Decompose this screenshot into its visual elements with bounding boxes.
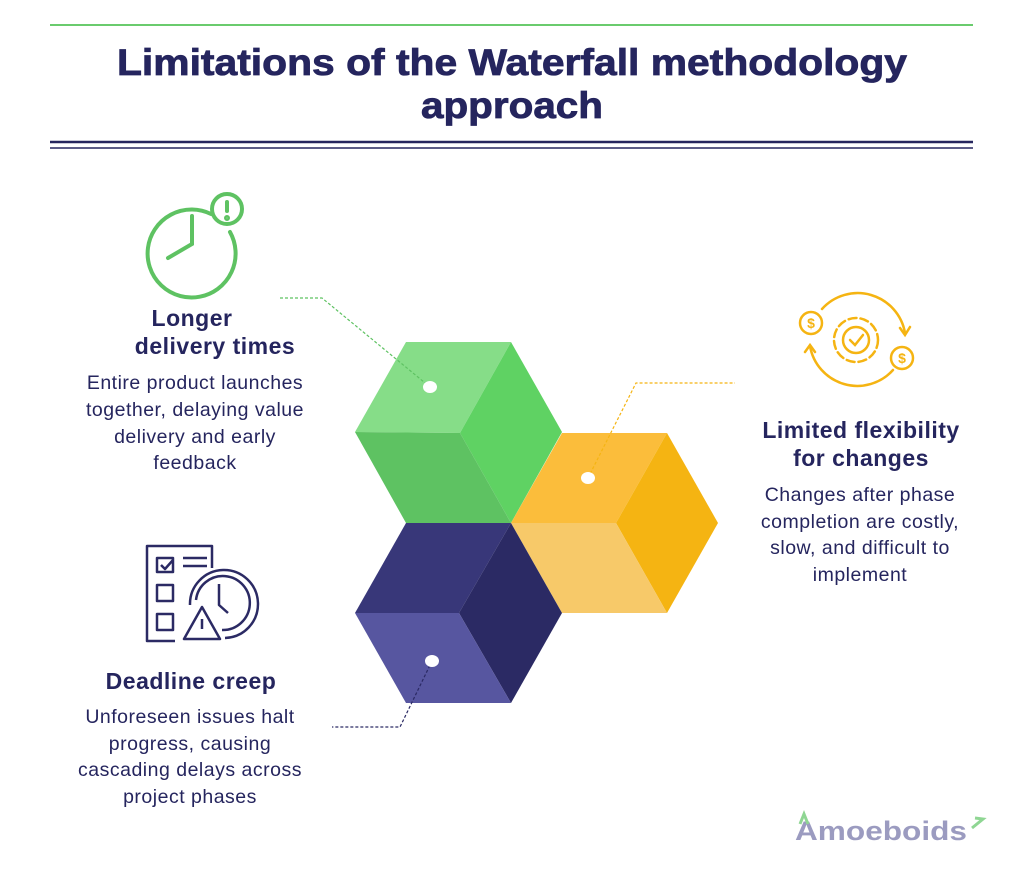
icon: gear with money cycle: $ (807, 315, 815, 331)
text: longer delivery times: Entire product launches (87, 372, 303, 394)
text: longer delivery times: delivery and early (114, 426, 276, 448)
icon: checklist with clock and warning (147, 546, 258, 641)
text: longer delivery times: together, delaying value (86, 399, 304, 421)
text: limited flexibility: Changes after phase (765, 484, 955, 506)
title (117, 42, 907, 126)
text: limited flexibility (761, 417, 960, 586)
text: limited flexibility: implement (813, 564, 907, 586)
icon: gear with money cycle: $ (898, 350, 906, 366)
logo: Amoeboids: Amoeboids (795, 816, 967, 846)
text: deadline creep: Deadline creep (106, 668, 276, 694)
text: limited flexibility: completion are costly, (761, 511, 959, 533)
text: longer delivery times: delivery times (135, 333, 295, 359)
cube: green (355, 342, 562, 523)
text: deadline creep: project phases (123, 786, 257, 808)
text: limited flexibility: Limited flexibility (762, 417, 960, 443)
connector: green (280, 298, 437, 393)
title: Limitations of the Waterfall methodology (117, 42, 907, 83)
text: deadline creep (78, 668, 302, 808)
text: longer delivery times (86, 305, 304, 474)
cube: orange (511, 433, 718, 613)
text: deadline creep: cascading delays across (78, 759, 302, 781)
text: deadline creep: Unforeseen issues halt (85, 706, 295, 728)
connector: orange (581, 383, 735, 484)
text: longer delivery times: feedback (153, 452, 237, 474)
icon: clock with alert (148, 194, 242, 297)
text: deadline creep: progress, causing (109, 733, 271, 755)
title: approach (421, 85, 603, 126)
text: limited flexibility: slow, and difficult to (770, 537, 950, 559)
icon: gear with money cycle (800, 293, 913, 386)
text: longer delivery times: Longer (152, 305, 232, 331)
cube: navy (355, 523, 562, 703)
text: limited flexibility: for changes (793, 445, 929, 471)
connector: navy (332, 655, 439, 727)
